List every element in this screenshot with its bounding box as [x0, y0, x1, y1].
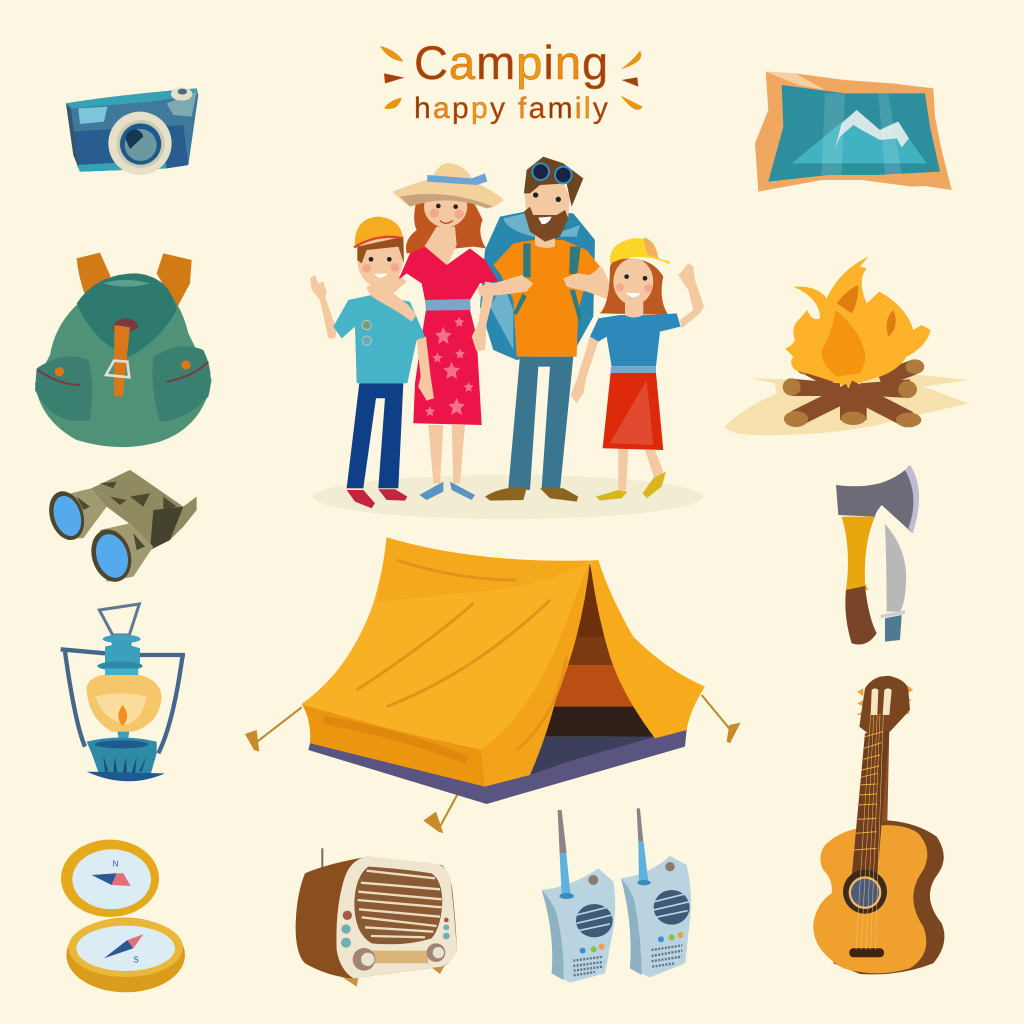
icon: compass: N	[113, 860, 119, 869]
mother	[367, 163, 504, 500]
icon: camera	[66, 87, 198, 175]
icon: compass: S	[133, 956, 139, 965]
title: happy family	[414, 92, 610, 125]
icon: binoculars	[43, 470, 197, 587]
ropes and pegs	[245, 695, 741, 833]
walkie-talkie right	[621, 808, 691, 977]
title	[380, 36, 643, 125]
icon: guitar	[813, 676, 944, 974]
icon: walkie-talkies	[542, 808, 691, 983]
icon: map	[755, 72, 952, 192]
walkie-talkie left	[542, 810, 615, 983]
father	[477, 157, 612, 502]
icon: backpack	[35, 253, 212, 447]
title: Camping	[414, 36, 609, 89]
icon: radio	[296, 848, 457, 987]
son	[310, 217, 434, 508]
icon: axe and knife	[836, 465, 919, 645]
icon: tent	[245, 537, 741, 833]
family shadow	[313, 475, 703, 519]
daughter	[571, 237, 704, 501]
group: family	[310, 157, 704, 508]
icon: campfire	[725, 257, 968, 435]
skirt flowers	[425, 317, 474, 416]
icon: compass	[61, 840, 185, 992]
icon: lantern	[61, 604, 185, 781]
